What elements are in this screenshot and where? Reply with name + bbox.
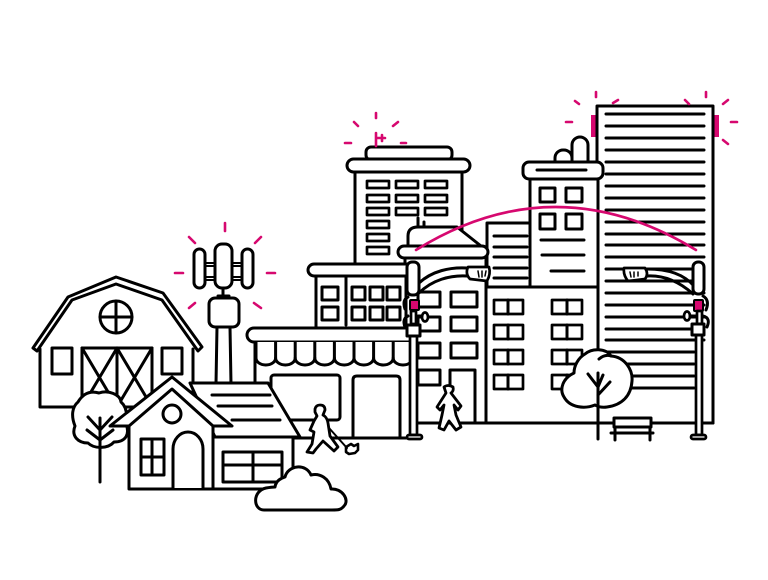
lower office building [485,287,598,423]
ground line [485,422,713,424]
office tower with rooftop cap [347,147,470,267]
mid-rise building [308,264,412,330]
street lamp: right [624,262,708,439]
signal rays: cell tower [175,223,275,308]
farmhouse [110,377,232,489]
barn [33,277,202,407]
cloud [256,467,346,510]
bench [611,418,653,440]
tree: right [562,350,632,439]
garage wing [190,383,300,489]
signal arc between lamps [416,207,696,250]
cell tower [194,244,253,384]
pedestrian [437,386,461,430]
street lamp: left [404,262,490,439]
person walking a dog [307,405,358,454]
rooftop building with chimneys [523,137,603,288]
striped side building [487,223,531,287]
high-rise tower [591,106,719,423]
tree: left [73,392,128,482]
signal rays: high-rise [566,92,737,144]
columned civic building [398,218,488,423]
shop with awning [247,328,415,438]
signal rays and antenna: office tower [345,113,406,146]
